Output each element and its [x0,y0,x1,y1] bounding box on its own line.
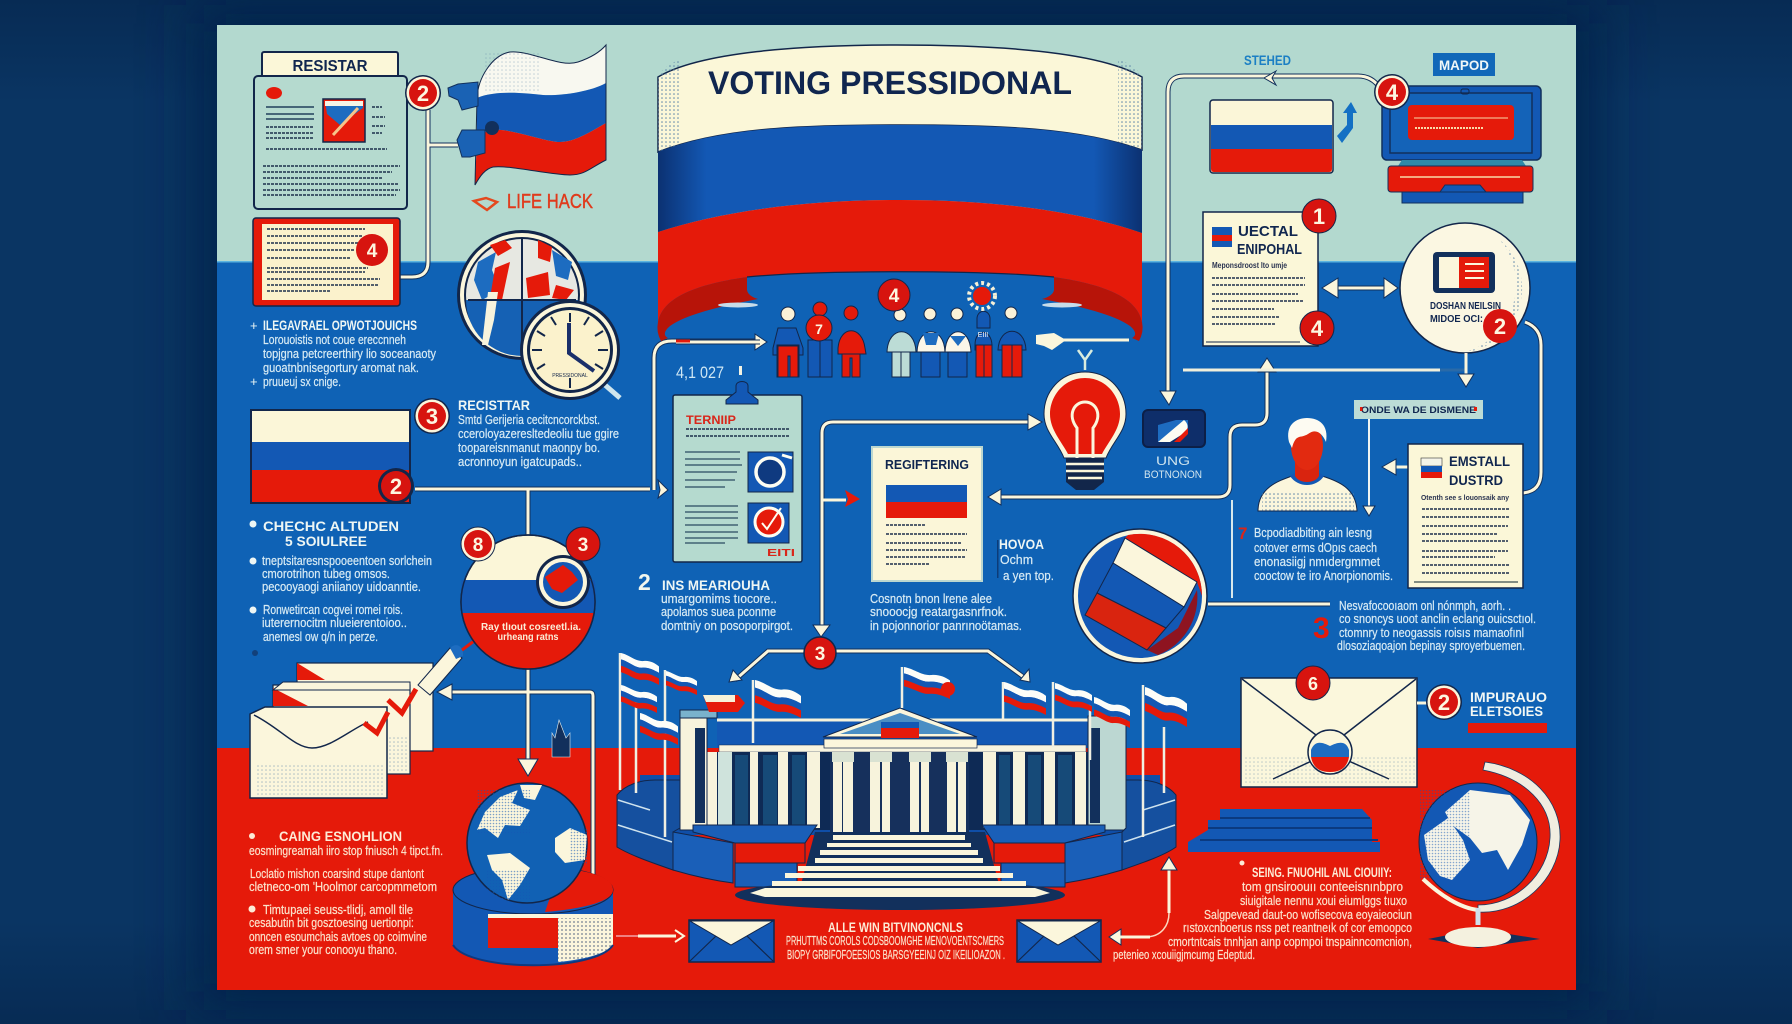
left tower [680,710,717,830]
figure 8 [998,307,1026,377]
text block: left check section: anemesl ow q/n in perze. [263,629,378,644]
text block: step 3 right: Nesvafocooıaom onl nónmph, aorh. . [1339,598,1511,613]
icon: circular flag with badges: Ray tlıout cosreetl.ia. [481,621,581,633]
figure 4 [887,309,916,377]
text block: right red section [1113,860,1412,962]
badge: 3: 3 [578,535,588,556]
figure 3 [838,306,866,377]
illustration: government building [617,708,1176,910]
arrow: double-headed [1322,278,1398,298]
panel: uectal document [1203,212,1318,346]
text block: step 7: enonasiigj nmıdergmmet [1254,554,1380,569]
label: life hack: LIFE HACK [507,191,594,213]
text block: right red section: rıstoxcnboerus nss pet reantneık of cor emoopco [1183,920,1412,935]
icon: flag top right [1210,100,1333,173]
figure 6 [945,308,971,377]
arrow: doc to person [1382,459,1408,475]
text: date: 4,1 027 [676,363,724,382]
icon: envelope left [689,920,774,962]
globe sphere [1419,783,1537,901]
banner: title ribbon: VOTING PRESSIDONAL [708,65,1072,101]
ribbon curl left [657,277,758,341]
text block: right red section: siuigitale nennu xoui eiumlggs tıuxo [1240,893,1407,908]
text block: center note: in pojonnorior panrınoötamas. [870,618,1022,633]
text block: legal notes: guoatnbnisegortury aromat nak. [263,360,419,375]
envelope middle [273,682,410,774]
text block: left check section: CHECHC ALTUDEN [263,518,399,534]
badge: 1: 1 [1313,204,1325,229]
panel: emstall document: Otenth see s louonsaik any [1421,495,1509,502]
icon: stacked envelopes with checks [250,663,433,798]
badge: 3 at building: 3 [815,644,825,665]
flag group right [1004,682,1187,728]
label box: none was [1354,400,1483,419]
connector: ribbon to plug [1036,333,1129,350]
label: life hack [474,191,594,213]
panel: red note [253,218,400,306]
icon: blue steps [1188,809,1380,852]
text block: step 2 left center [638,569,793,633]
icon: pen [418,641,474,695]
outer ring wall right [1122,780,1176,870]
badge: 3 [566,527,600,561]
pedestal [453,866,613,965]
text block: step 3 right [1313,598,1536,653]
text block: registrar step 3: acronnoyun igatcupads.. [458,454,582,469]
heading tab: Resistar [262,52,398,78]
mini flag [1212,227,1232,247]
badge: 2 on flag [378,468,414,504]
icon: device using button: BOTNONON [1144,469,1202,481]
text block: right red section: Salgpevead daut-oo wofisecova eoyaieociun [1204,907,1412,922]
arrow: bar to circle [1183,353,1474,387]
flag group left [621,653,745,745]
steps [735,832,1065,910]
badge: 2 at circle: 2 [1494,314,1506,339]
icon: globe on base [453,783,613,965]
arrow: flag to clipboard [415,334,767,535]
pediment [823,708,977,738]
text block: registrar step 3: toopareisnmanut maonpy bo. [458,440,600,455]
heading tab: Resistar: RESISTAR [292,58,368,75]
connector: person text to flag circle [1208,500,1330,604]
text block: legal notes: Lorouoistis not coue ereccnneh [263,332,406,347]
text block: hovoa: Ochm [1000,552,1033,567]
figure 1 [773,307,803,377]
icon: person [1258,418,1357,511]
badge: 3: 3 [426,404,438,429]
back ring [640,775,1160,835]
panel: tricolor background [217,25,1576,990]
text block: step 7: cooctow te iro Anorpionomis. [1254,568,1393,583]
text block: step 7: 7 [1238,524,1247,543]
badge: 3 [414,398,450,434]
arrow: bulb loop and down to step 3 [813,414,1042,637]
outer ring wall left [617,780,680,870]
connector: label to person [1363,419,1375,516]
label: stehed: STEHED [1244,52,1291,68]
panel: clipboard ternip: TERNIIP [686,413,736,427]
badge: 2 with connector [1417,684,1462,720]
text block: step 2 left center: apolamos suea pconme [661,604,776,619]
connector: badge 3 to flags [729,651,1030,682]
mini flag [1421,458,1442,478]
portico [824,739,977,832]
badge: 4 on doc [1300,311,1334,345]
badge: 4 over people: 4 [889,286,900,307]
panel: uectal document: Meponsdroost lto umje [1212,261,1287,270]
text block: step 2 left center: domtniy on posoporpirgot. [661,618,793,633]
panel: uectal document: ENIPOHAL [1237,241,1302,258]
text block: step 2 left center: 2 [638,569,651,595]
text block: legal notes [250,317,436,389]
magnifier handle [605,385,620,398]
icon: light bulb [1044,350,1126,490]
text block: left check section: tneptsitaresnspooeentoen sorlchein [262,553,432,568]
panel: emstall document: DUSTRD [1449,472,1503,488]
text: impurauo elections: IMPURAUO [1470,689,1547,705]
badge: 8: 8 [473,535,483,556]
icon: desk globe [1419,762,1560,948]
panel: uectal document: UECTAL [1238,223,1298,240]
text block: step 3 right: co snoncys uoot anclin eclang ouicsctıol. [1339,611,1536,626]
text block: hovoa: a yen top. [1003,568,1054,583]
envelope front [250,707,408,798]
icon: big envelope [1241,666,1417,787]
front wall right [982,825,1122,887]
badge: 4: 4 [367,241,378,262]
mini ballot image [323,99,365,142]
text block: step 2 left center: INS MEARIOUHA [662,577,770,593]
text block: step 7 [1238,524,1393,583]
badge: 6 [1296,666,1330,700]
text block: right red section: SEING. FNUOHIL ANL CIOUIIY: [1252,864,1392,880]
text block: registrar step 3: cceroloyazeresltedeoliu tue ggire [458,426,619,441]
badge: 3 at building [804,637,836,669]
text block: caing esnohlion: Loclatio mishon coarsind stupe dantont [250,866,424,881]
text block: caing esnohlion: CAING ESNOHLION [279,828,402,844]
callout: circle device: DOSHAN NEILSIN [1430,301,1501,312]
text block: left check section: iuterernocitm nlueierentoioo.. [262,615,407,630]
text block: step 3 right: 3 [1313,612,1330,645]
text block: right red section: cmortntcais tnnhjan aınp copmpoi tnspainncomcnion, [1168,934,1412,949]
text block: left check section: cmorotrihon tubeg omsos. [262,566,390,581]
icon: waving flag with plugs [448,45,606,185]
text block: step 3 right: dlosoziaqoajon bepinay sproyerbuemen. [1337,638,1525,653]
badge: 1 [1302,199,1336,233]
front wall left [673,825,817,887]
roof band [717,720,1088,748]
ballot mark 2 [748,503,789,543]
text block: alle win: BIOPY GRBIFOFOEESIOS BARSGYEEINJ OIZ IKEILIOAZON . [787,947,1005,962]
badge: 2 on flag: 2 [390,474,402,499]
label: mapod [1433,53,1495,76]
text: impurauo elections: ELETSOIES [1470,703,1543,719]
arrow: ribbon to people [676,341,760,342]
text: impurauo elections [1468,689,1547,733]
text block: caing esnohlion: Timtupaei seuss-tlidj, amoll tile [263,902,413,917]
text block: hovoa [997,536,1054,583]
text block: legal notes: + [250,374,258,389]
callout: circle device: MIDOE OCI: [1430,314,1483,325]
text block: step 7: Bcpodiadbiting ain lesng [1254,525,1372,540]
badge: 4 [356,234,388,266]
text block: left check section: 5 SOIULREE [285,533,367,549]
text block: hovoa: HOVOA [999,536,1044,552]
text block: center note: Cosnotn bnon lrene alee [870,591,992,606]
map globe [457,230,587,360]
icon: map and clock [457,230,620,400]
clock [520,300,620,400]
text block: caing esnohlion [248,828,443,957]
badge: 4 at laptop [1374,74,1410,110]
text block: alle win: PRHUTTMS COROLS CODSBOOMGHE MENOVOENTSCMERS [786,933,1004,948]
text block: left check section: pecooyaogi aniianoy uidoanntie. [262,579,421,594]
text block: center note: snooocjg reatargasnrfnok. [870,604,1007,619]
panel: clipboard ternip: EITI [767,548,795,559]
arrow: up from red text [1109,857,1177,945]
arrow: base to envelope [616,930,684,942]
text block: center note [870,591,1022,633]
arrow: laptop to using button [1160,71,1380,405]
clip [726,382,758,404]
icon: device using button [1143,410,1205,481]
connector: top-left document links [398,110,458,277]
icon: circular flag with badges [461,527,600,669]
connector: circle to emstall [1522,322,1541,493]
banner: title ribbon [657,45,1143,341]
badge: 8 [461,527,495,561]
icon: flag left [251,410,410,503]
figure 7 [975,311,992,377]
panel: registering document: REGIFTERING [885,458,969,472]
flag group center [755,667,955,718]
device icon [1433,252,1495,293]
arrow: into registering from right [988,358,1276,505]
panel: emstall document [1408,444,1523,588]
wing facade [707,745,1098,830]
flag poles [620,653,1164,837]
text block: legal notes: pruueuj sx cnige. [263,374,341,389]
icon: tilted flag circle [1073,529,1207,663]
text block: caing esnohlion: cletneco-om 'Hoolmor carcopmmetom [249,879,437,894]
figure 5 [917,308,945,377]
badge: 6: 6 [1308,674,1318,694]
arrows: circle flag to globe and base [437,668,601,902]
check marks [364,689,416,733]
text block: caing esnohlion: cesabutin bit gosztoesing uertionpi: [249,915,414,930]
text block: alle win: ALLE WIN BITVINONCNLS [828,919,963,935]
icon: laptop [1382,86,1541,203]
text block: registrar step 3 [458,397,619,469]
seal [1308,730,1352,774]
text block: left check section: Ronwetircan cogvei romei rois. [263,602,403,617]
badge: 2: 2 [417,81,429,106]
text block: step 3 right: ctomnry to neogassis roisıs mamaofınl [1339,625,1524,640]
badge: 2 at circle [1483,309,1517,343]
text block: registrar step 3: Smtd Gerijeria cecitcncorckbst. [458,412,600,427]
text block: right red section: tom gnsiroouıı conteeisnınbpro [1242,879,1403,894]
callout: circle device [1400,223,1530,353]
icon: envelope right [1017,920,1101,962]
icon: small star marker [552,720,570,757]
label box: none was: ONDE WA DE DISMENE [1361,405,1476,416]
text block: step 2 left center: umargomims tıocore.. [661,591,777,606]
ballot mark 1 [748,452,793,492]
badge: 4 at laptop: 4 [1386,80,1399,105]
ribbon curl right [1042,277,1143,341]
figure 7: EIII [978,332,988,339]
badge: 4 over people [878,279,910,311]
icon: circular flag with badges: urheang ratns [498,631,559,643]
panel: registering document [872,447,982,581]
icon: blue arrow [1337,102,1357,143]
badge: 2 [405,75,441,111]
envelope back [297,663,433,751]
icon: sun [969,283,995,309]
text block: caing esnohlion: onncen esoumchais avtoes op coimvine [249,929,427,944]
figures: group of voters [773,302,1026,377]
label: mapod: MAPOD [1439,57,1489,73]
panel: clipboard ternip [673,382,802,562]
globe stand [1423,762,1560,948]
icon: device using button: UNG [1156,454,1190,468]
badge: 2 with connector: 2 [1438,690,1450,715]
text block: step 7: cotover erms dOpıs caech [1254,540,1377,555]
clock: PRESSIDONAL [552,373,588,379]
figure 2: 7 [815,321,823,337]
text block: alle win [786,919,1005,962]
text block: registrar step 3: RECISTTAR [458,397,530,413]
right tower [1088,716,1126,830]
text block: legal notes: topjgna petcreerthiry lio soceanaoty [263,346,436,361]
globe sphere [467,783,587,903]
badge: 4 on doc: 4 [1311,316,1324,341]
panel: registrar document [254,52,407,209]
text block: legal notes: ILEGAVRAEL OPWOTJOUICHS [263,317,417,333]
figure 2 [806,302,832,377]
text block: caing esnohlion: orem smer your conooyu thano. [249,942,397,957]
panel: emstall document: EMSTALL [1449,453,1510,469]
text block: left check section [250,518,432,656]
inset seal [536,555,590,609]
text block: legal notes: + [250,318,258,333]
red plinths [735,843,1065,863]
text block: right red section: petenieo xcouiigjmcumg Edeptud. [1113,947,1255,962]
flags around building [620,653,1187,837]
text block: caing esnohlion: eosmingreamah iiro stop fniusch 4 tipct.fn. [249,843,443,858]
